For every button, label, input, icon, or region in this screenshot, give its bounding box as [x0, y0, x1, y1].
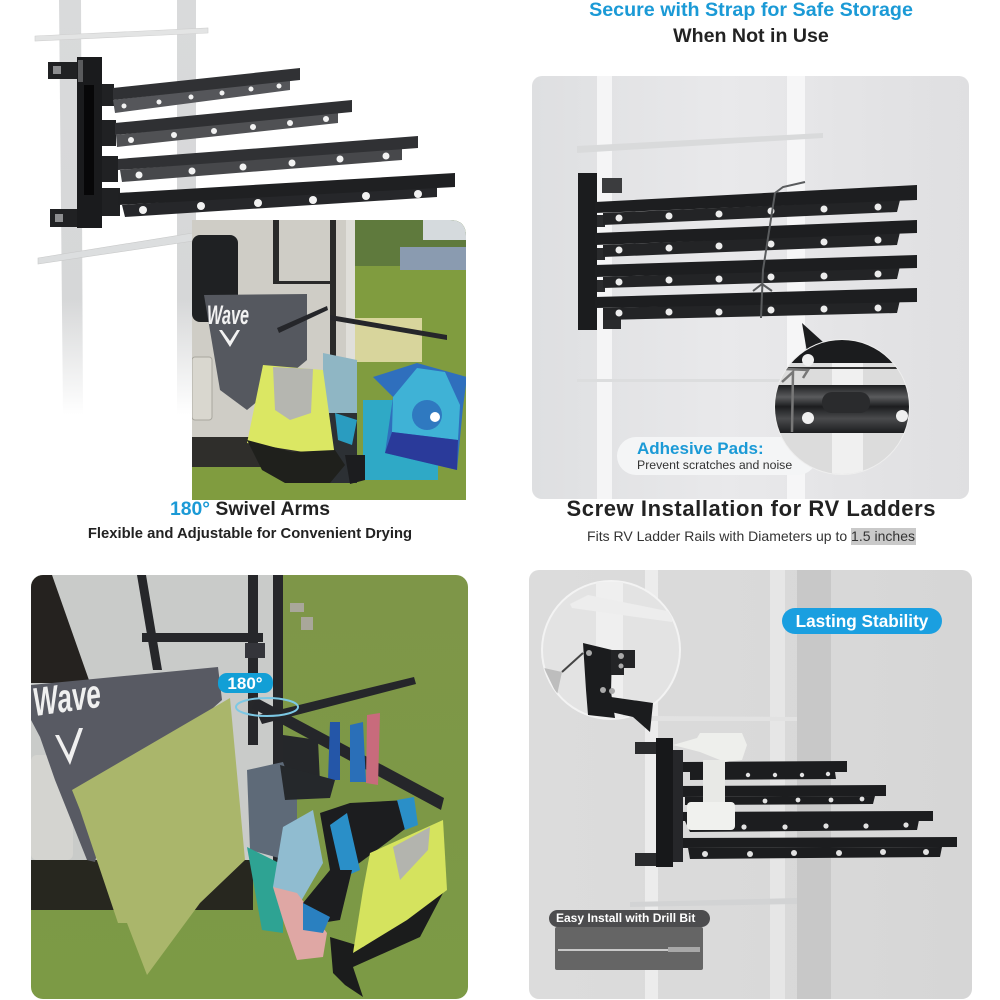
photo: laundry drying on rack beside RV	[192, 220, 467, 500]
towel with Wave print: Wave	[30, 672, 104, 725]
zoom circle: clamp detail	[541, 580, 681, 732]
panel: drill installation view	[529, 570, 972, 999]
callout: adhesive pads	[617, 437, 817, 475]
towel with Wave print	[204, 294, 307, 410]
photo: towels and life vests drying on the rack	[30, 575, 468, 999]
heading: 180° swivel arms: 180° Swivel Arms	[170, 498, 330, 520]
heading: secure with strap	[589, 0, 913, 47]
rack arms	[252, 677, 444, 810]
towel with Wave print: Wave	[207, 300, 249, 330]
towel with Wave print	[30, 667, 222, 862]
callout: adhesive pads: Prevent scratches and noise	[637, 458, 792, 472]
panel: strap storage view	[532, 76, 969, 499]
badge: lasting stability	[782, 608, 942, 634]
swivel arms	[113, 68, 455, 217]
panel: swivel rack product view	[35, 0, 455, 415]
callout: drill bit	[549, 910, 710, 970]
cordless drill	[673, 733, 747, 830]
rack bracket and clamps	[48, 57, 120, 228]
heading: 180° swivel arms	[88, 498, 412, 542]
subheading: Flexible and Adjustable for Convenient Drying	[88, 526, 412, 542]
strap	[753, 182, 805, 318]
rack bracket	[578, 173, 622, 330]
subheading with highlighted value: Fits RV Ladder Rails with Diameters up to 1.5 inches	[587, 528, 915, 544]
arms	[677, 761, 957, 859]
hanging clothes	[247, 713, 447, 997]
badge: 180°: 180°	[227, 674, 263, 693]
heading: screw installation	[566, 496, 936, 545]
heading: screw installation: Screw Installation for RV Ladders	[566, 496, 936, 521]
rack bracket	[635, 738, 683, 867]
badge: lasting stability: Lasting Stability	[796, 611, 929, 631]
zoom circle: adhesive pad detail	[770, 323, 915, 480]
ladder rails	[35, 0, 208, 415]
callout: drill bit: Easy Install with Drill Bit	[556, 911, 695, 925]
callout: adhesive pads: Adhesive Pads:	[637, 439, 764, 458]
green towel	[72, 698, 245, 975]
subheading: When Not in Use	[673, 25, 829, 47]
badge: 180°	[218, 673, 273, 693]
folded arms	[595, 185, 917, 320]
